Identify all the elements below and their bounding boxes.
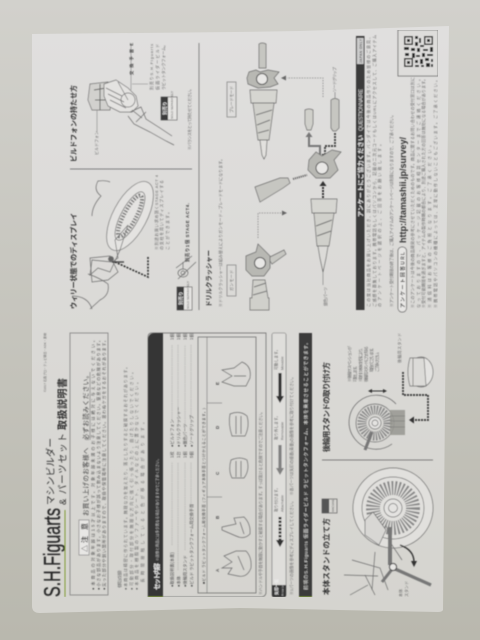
list: right column: 1個 [182,333,188,340]
list: left column: 1台 [175,451,182,458]
note: Drill Crusher modes: ※ドリルクラッシャーは組み替えによりガンモード⇔ブレードモードになります。 [217,157,223,307]
note: Stage Act 4 [153,174,170,250]
note: Stage Act 4: ことができます。 [164,210,170,250]
callout line [334,92,336,98]
labels: hands A to E: A [215,568,220,572]
label: body stand: 本体 [397,589,403,597]
dashed arrow: stand to bike [115,257,148,277]
note: suspension [346,346,380,382]
text: fine print [409,77,438,308]
arrow: movable: Movable [280,356,284,370]
text: fine print: ※携帯電話やパソコンの機種によっては、正常に動作しないこともございます。ご了承ください。 [432,78,438,308]
spring arrow [293,175,307,179]
note: suspension: ※後輪サスペンションが [346,346,352,382]
arrow: removable [274,414,284,475]
divider: top sheet / drill crusher [198,43,200,310]
note: sold separately figure: 別売りS.H.Figuarts [148,44,154,90]
title: product: 取扱説明書 [56,378,69,430]
tag: included: MACHINE [331,499,335,512]
panel: arrow legend [272,333,286,597]
arrow: movable [274,348,284,403]
bar: set contents header [148,333,163,597]
leader dots [172,345,191,570]
note: suspension: ご了承ください。 [374,350,380,372]
text: handling notes: ●可動部分・取付部分を無理な方向に強く引っ張ったり、曲げたりしないでください。 [128,370,134,590]
label: body stand: スタンド [403,581,409,597]
illustration: assembled blade mode [247,43,279,159]
heading: please cooperate: アンケートにご協力ください [357,135,365,217]
dashed arrow: attach grip [325,133,335,155]
arrow: stand swing [400,545,417,567]
labels: hands A to E: C [215,471,220,475]
note: questionnaire period: ※アンケート受付期限の終了後は、ご購入アイテムのアンケートページは削除になりますので、ご了承ください。 [388,113,394,307]
list: right column: 1個 [175,333,182,340]
heading: holding the phone: ビルドフォンの持たせ方 [69,85,78,162]
note: handle warning: ※ハンドルや手首を無理に動かすと破損する場合があります。すっぽ抜けると危険ですのでご注意ください。 [257,410,263,595]
heading: Drill Crusher: ドリルクラッシャー [204,250,213,307]
pill: URL label: アンケート回答URL [400,252,406,308]
badge: arrow list: Arrow List [280,583,284,596]
hand D [229,412,248,436]
text: handling notes [116,365,145,590]
bar: figure can ride: 前項のS.H.Figuarts 仮面ライダービルド ラビットタンクフォーム、本体を乗車させることができます。 [302,340,310,590]
text: fine print: なっておりますので、パッケージ記載のお客様相談センターまでご連絡ください。 [415,77,421,308]
label: body stand [397,581,409,597]
list: left column: 1個 [182,451,188,458]
list: right column [168,333,195,447]
panel: caution [70,333,108,595]
heading: wheelie display: ウィリー状態でのディスプレイ [69,213,78,309]
tag: gun mode [227,265,236,296]
dashed arrow: stand to wheel [403,372,428,420]
list: right column: ●ビルドフォン [168,419,174,447]
list: left column: 1枚 [168,451,176,458]
text: fine print: ※受付可能期間を過ぎますと、アイテムの製作時期の都合により、別途ご購入された方の回答は無効になる場合があります。 [420,77,426,308]
icon: stand base [176,256,196,279]
bar: questionnaire header [356,36,364,310]
part: stand mounted [390,410,405,435]
badge: Japan only: JAPAN ONLY [359,38,363,63]
badge: caution: △注 意 [80,523,89,552]
text: handling notes: 長時間接触していると色が移る場合があります。 [139,420,145,590]
note: sold separately figure: ラビットタンクフォーム。 [160,43,166,90]
part: rear stand [408,357,433,387]
note: sold separately figure [148,43,166,90]
text: request body: のアンケートページを選択の上、ご回答をお願い致します。 [376,142,382,307]
list: left column: 5個 [188,451,195,458]
title: product: マシンビルダー [45,438,57,505]
arrowhead [281,76,286,80]
text: request body: ご感想を募集しております。携帯電話もしくはパソコンから、記載の二次元コードもしくはURLにアクセスして、ご購入アイテム [371,35,377,307]
text: handling notes: ●本商品は精密に作られています。無理な力を加えたり、落としたりすると破損するおそれがあります。 [122,365,128,590]
text: warnings: ●本商品の対象年齢は15才以上です。対象年齢未満のお子様には絶対に与えないでください。 [90,338,96,590]
section: questionnaire [356,30,438,312]
labels: hands A to E [215,382,220,572]
arrowhead [322,154,328,159]
text: warnings [90,338,106,590]
list: right column: 1個 [188,333,195,340]
title: product: & パーツセット [58,433,69,505]
arrow: attachable [274,486,284,547]
heading: set contents: セット内容 [152,562,161,590]
illustration: bike in wheelie [72,174,163,309]
label: swap hand E: 交換手首E [128,43,135,75]
bar: figure can ride [299,333,312,597]
label: rear stand: 後輪用スタンド [396,333,402,363]
QR code [398,30,438,76]
gray arrow: remove grip [309,136,320,157]
divider between upper sections [70,168,192,170]
list: left column: ●取扱説明書(本書) [168,552,176,587]
note: Stage Act 4: ※別途お買い求め頂くSTAGE ACT 4 [153,174,159,250]
heading: attach rear stand: 後輪用スタンドの取り付け方 [321,362,331,452]
logo: S.H.Figuarts [39,508,65,597]
copyright: ©2017 石森プロ・テレビ朝日・ADK・東映 [42,333,47,392]
dashed guide: grip to blade [287,78,323,97]
tag: sold separately [177,281,192,310]
arrowhead [409,416,414,424]
arrowhead [282,210,287,216]
text: fine print: ※このアンケートは今後の商品開発の参考にさせていただくためのものです。商品に関するお問い合わせの受付窓口は別に [409,77,415,308]
badge: arrow list [272,579,286,597]
heading: QUESTIONNAIRE: QUESTIONNAIRE [358,89,364,131]
section: Wheelie display [69,174,196,310]
badge: caution [79,520,89,555]
divider: stand sections [322,459,433,461]
illustration: hand holding phone [88,80,174,145]
note: sold separately figure: 仮面ライダービルド [154,44,160,90]
text: request body: この度は当社商品をお買い上げいただき、誠にありがとうございます。バンダイでは今後の商品作りのため皆様のご意見、 [365,35,371,307]
illustration: gun mode [246,244,286,310]
arrowhead [306,132,312,137]
text: handling notes: ●本商品を樹脂製のソファーやシート、タイルなどの上に置かないでください。 [133,380,139,590]
tag: blade mode [227,82,236,117]
part: short grip [305,109,313,130]
text: warnings: ●小さな部品があります。小さなお子様が誤って飲み込まないよう注意してください。窒息などの危険があります。 [95,338,101,590]
list: right column: 1個 [168,333,176,340]
part: center hub [308,150,341,178]
underline [89,372,91,440]
labels: hands A to E: B [215,515,220,519]
dashed guide: gun to blade [258,213,283,238]
text: request body [365,35,382,307]
note: suspension: 可動します。 [352,364,358,382]
list: right column: ●ドリルクラッシャー [176,407,182,447]
tag: sold separately: SOLD SEPARATELY [170,91,174,119]
part: drill with silver tip [311,199,337,285]
dashed arrow: drill to hub [322,186,324,198]
pill: URL label [398,247,406,312]
hand B [222,517,250,538]
heading: how to stand: 本体スタンドの立て方 [321,518,331,595]
hand E [222,362,250,386]
table: swap hands [198,337,256,593]
text: fine print: ※通信料はお客様のご負担となります。ご了承ください。 [426,143,432,308]
note: suspension: ※取付け本体の状況により、 [357,346,363,382]
part: sword grip [331,98,339,131]
section: holding the Build phone [69,43,192,162]
list: left column [168,451,195,587]
arrow: removable: 取り外します。 [274,414,278,440]
label: silver part: 銀色パーツ [322,287,328,306]
list: left column: ●本体 [175,575,182,587]
hand C [230,458,248,478]
list: right column: ●ソードグリップ [188,414,195,447]
illustration: rear wheel [349,395,396,450]
label: Stage Act 4: 別売り1個 STAGE ACT4. [184,203,191,262]
text: warnings: ●尖った部分や鋭い箇所がありますので、取扱や保管場所に注意してください。思わぬケガをするおそれがあります。 [100,338,106,590]
illustration: front wheel with stand [344,468,433,595]
note: balance: ※バランスをとって持たせてください。 [186,87,192,150]
tag: sold separately [161,91,177,120]
section: body stand [321,468,433,597]
paper sheet [32,26,449,613]
arrow: attachable: 取り付けます。 [274,486,278,512]
arrowhead [320,181,326,186]
note: Stage Act 4: の支柱を用いてディスプレイする [158,180,164,250]
list: left column: ●後輪用スタンド [182,555,188,587]
title: product [45,378,69,505]
tag: blade mode: ブレードモード [228,86,234,113]
part: separated drill tip [255,178,290,202]
tag: gun mode: ガンモード [228,270,234,291]
arrow: movable: 可動します。 [274,348,278,370]
panel: set contents [148,333,266,597]
text: handling notes: 〈使用上の注意〉 [116,568,122,590]
label: sword grip: ソードグリップ [331,67,337,92]
callout lines [97,44,148,132]
logo: S.H.Figuarts: S.H.Figuarts [39,508,65,597]
part: stand on wheel stripes [390,416,405,427]
list: right column: ●銀色パーツ [182,424,188,447]
labels: hands A to E: D [215,425,220,429]
arrow: attachable: Attachable [280,495,284,512]
note: hand table title: ■ビルド ラビットタンクフォーム用交換手首 (フィギュア本体手首とつけかえることができます。) [201,408,206,584]
section: rear stand [321,333,433,452]
tag: sold separately: 別売り [178,292,184,305]
tag: sold separately: SOLD SEPARATELY [186,281,190,309]
tag: sold separately: 別売り [162,102,168,115]
URL: http://tamashii.jp/survey/ [398,137,409,243]
arrow: removable: Removable [280,422,284,440]
arrow: suspension [368,389,387,393]
badge: arrow list: 矢印一覧 [273,579,279,595]
stand arm [382,527,431,585]
list: left column: ●ビルド ラビットタンクフォーム用交換手首 [188,504,195,587]
hand A [222,551,251,576]
note: suspension: 後輪用スタンドに力が掛る [362,346,368,382]
label: Build phone: ビルドフォン [93,131,99,155]
note: contents header: ※画像と商品には多少異なる場合がありますのでご了承ください。 [154,457,160,561]
heading: to customers: お買い上げのお客様へ 必ずお読みください。 [81,372,90,516]
green edge [148,596,163,598]
badge: Japan only [357,38,364,64]
note: parts display: ※1パーツの画像を参考にディスプレイしてください。 ※各パーツは矢印の順番(青番)の画像を参考に取り付けてください。 [288,375,294,595]
note: suspension: 場合がございます。 [368,346,374,372]
labels: hands A to E: E [215,382,220,385]
